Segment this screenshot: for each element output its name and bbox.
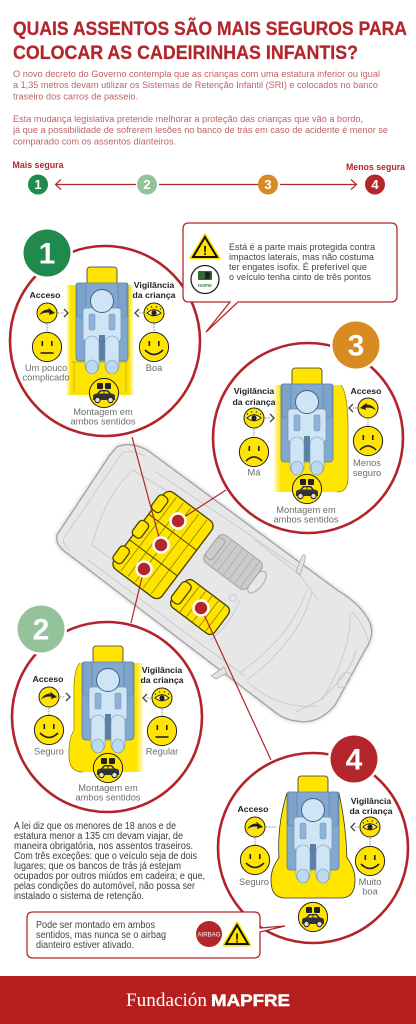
seat illustration [69, 646, 144, 772]
access rating: Um pouco [25, 363, 67, 373]
footer band: Fundación [126, 990, 207, 1011]
callout: airbag note: Pode ser montado em ambos [36, 920, 155, 931]
child supervision rating: da criança [350, 806, 393, 816]
badge 4: 4 [346, 744, 363, 776]
access rating [33, 674, 70, 756]
mounting: ambos sentidos [75, 792, 141, 802]
callout: airbag note: sentidos, mas nunca se o airbag [36, 930, 166, 941]
law text: estatura menor a 135 cm devam viajar, de [14, 831, 183, 842]
icon: warning [191, 235, 219, 258]
panel: position 3 [213, 319, 403, 533]
seat markers [136, 514, 208, 616]
law text [14, 821, 205, 902]
child supervision rating [233, 386, 276, 478]
icon: warning: ! [235, 930, 239, 946]
child supervision rating: boa [362, 886, 379, 896]
access rating: seguro [353, 468, 381, 478]
callout: isofix note: o veículo tenha cinto de três pontos [229, 272, 371, 283]
safety scale: Mais segura [12, 160, 64, 170]
access rating: Acceso [33, 674, 63, 684]
law text: instalado o sistema de retenção. [14, 891, 144, 902]
mounting: ambos sentidos [273, 514, 339, 524]
child supervision rating [141, 665, 184, 756]
yellow rear bench [108, 487, 216, 601]
mounting [273, 474, 339, 524]
law text: A lei diz que os menores de 18 anos e de [14, 821, 176, 832]
safety scale: 1 [34, 177, 42, 192]
icon: isofix: ISOFIX [198, 283, 212, 288]
grey driver seat [201, 532, 265, 592]
access rating [349, 386, 383, 478]
access rating: complicado [22, 372, 70, 382]
law text: ocupados por outros miúdos em cadeira; e que, [14, 871, 205, 882]
intro paragraphs: traseiro dos carros de passeio. [13, 92, 138, 102]
access rating: Menos [353, 458, 381, 468]
icon: isofix [191, 266, 219, 294]
child supervision rating: da criança [141, 675, 184, 685]
connector lines to seats [131, 437, 271, 760]
callout: isofix note: ter engates isofix. É preferível que [229, 262, 367, 273]
seat illustration [273, 368, 348, 492]
child supervision rating: da criança [233, 397, 276, 407]
icon: airbag: AIRBAG [198, 932, 220, 938]
mounting: ambos sentidos [70, 416, 136, 426]
access rating: Seguro [34, 746, 64, 756]
callout: isofix note: Está é a parte mais protegida contra [229, 242, 376, 253]
child supervision rating: Regular [146, 746, 178, 756]
law text: Com três exceções: que o veículo seja de dois [14, 851, 197, 862]
child supervision rating: Vigilância [351, 796, 391, 806]
child supervision rating: Boa [146, 363, 163, 373]
law text: lugares; que os bancos de trás já estejam [14, 861, 181, 872]
icon: warning: ! [203, 243, 207, 258]
safety scale: 4 [371, 177, 379, 192]
badge 4 [328, 733, 380, 785]
mounting [75, 753, 141, 802]
car top view [57, 445, 372, 722]
footer band: MAPFRE [211, 991, 290, 1010]
access rating: Acceso [351, 386, 381, 396]
access rating: Acceso [30, 290, 60, 300]
access rating: Acceso [238, 804, 268, 814]
icon: car mirrors [211, 555, 305, 679]
seat illustration [271, 776, 355, 898]
mounting: Montagem em [73, 407, 133, 417]
mounting icon [298, 902, 328, 932]
child supervision rating [133, 280, 176, 373]
child supervision rating: Vigilância [142, 665, 182, 675]
yellow front passenger seat [167, 576, 232, 637]
mounting: Montagem em [276, 505, 336, 515]
safety scale: 2 [143, 177, 151, 192]
intro paragraphs [12, 69, 388, 148]
title: COLOCAR AS CADEIRINHAS INFANTIS? [13, 42, 358, 64]
child supervision rating: da criança [133, 290, 176, 300]
law text: pelas condições do automóvel, não possa ser [14, 881, 196, 892]
badge 2 [15, 603, 67, 655]
law text: maneira obrigatória, nos assentos traseiros. [14, 841, 193, 852]
intro paragraphs: já que a possibilidade de sofrerem lesões no banco de trás em caso de acidente é menor se [12, 125, 388, 136]
access rating [22, 290, 70, 382]
intro paragraphs: O novo decreto do Governo contempla que as crianças com uma estatura inferior ou igual [13, 69, 380, 80]
badge 1: 1 [39, 238, 55, 270]
icon: warning [224, 923, 250, 946]
badge 2: 2 [33, 614, 49, 646]
access rating: Seguro [239, 877, 269, 887]
icon: airbag [196, 921, 222, 947]
seat illustration [66, 267, 134, 395]
access rating [238, 804, 277, 887]
child supervision rating: Má [248, 468, 261, 478]
mounting [70, 378, 136, 426]
panel: position 2 [12, 603, 202, 812]
callout: airbag note [27, 912, 285, 958]
child supervision rating: Vigilância [234, 386, 274, 396]
panel: position 1 [10, 227, 200, 436]
badge 3: 3 [348, 330, 364, 362]
safety scale: 3 [264, 177, 272, 192]
child supervision rating: Vigilância [134, 280, 174, 290]
intro paragraphs: Esta mudança legislativa pretende melhorar a proteção das crianças que vão a bordo, [13, 114, 363, 125]
intro paragraphs: comparado com os assentos dianteiros. [13, 136, 176, 148]
panel: position 4 [218, 733, 408, 943]
safety scale [12, 160, 405, 194]
title [13, 17, 407, 64]
child supervision rating [350, 796, 393, 896]
callout: airbag note: dianteiro estiver ativado. [36, 940, 134, 951]
callout: isofix note [183, 223, 397, 332]
footer band [0, 976, 416, 1024]
safety scale: Menos segura [346, 162, 405, 172]
intro paragraphs: a 1,35 metros devam utilizar os Sistemas de Retenção Infantil (SRI) e colocados no banco [13, 80, 378, 91]
mounting: Montagem em [78, 783, 138, 793]
badge 3 [330, 319, 382, 371]
steering wheel [244, 568, 270, 596]
callout: isofix note: impactos laterais, mas não costuma [229, 252, 375, 263]
child supervision rating: Muito [359, 877, 381, 887]
badge 1 [21, 227, 73, 279]
